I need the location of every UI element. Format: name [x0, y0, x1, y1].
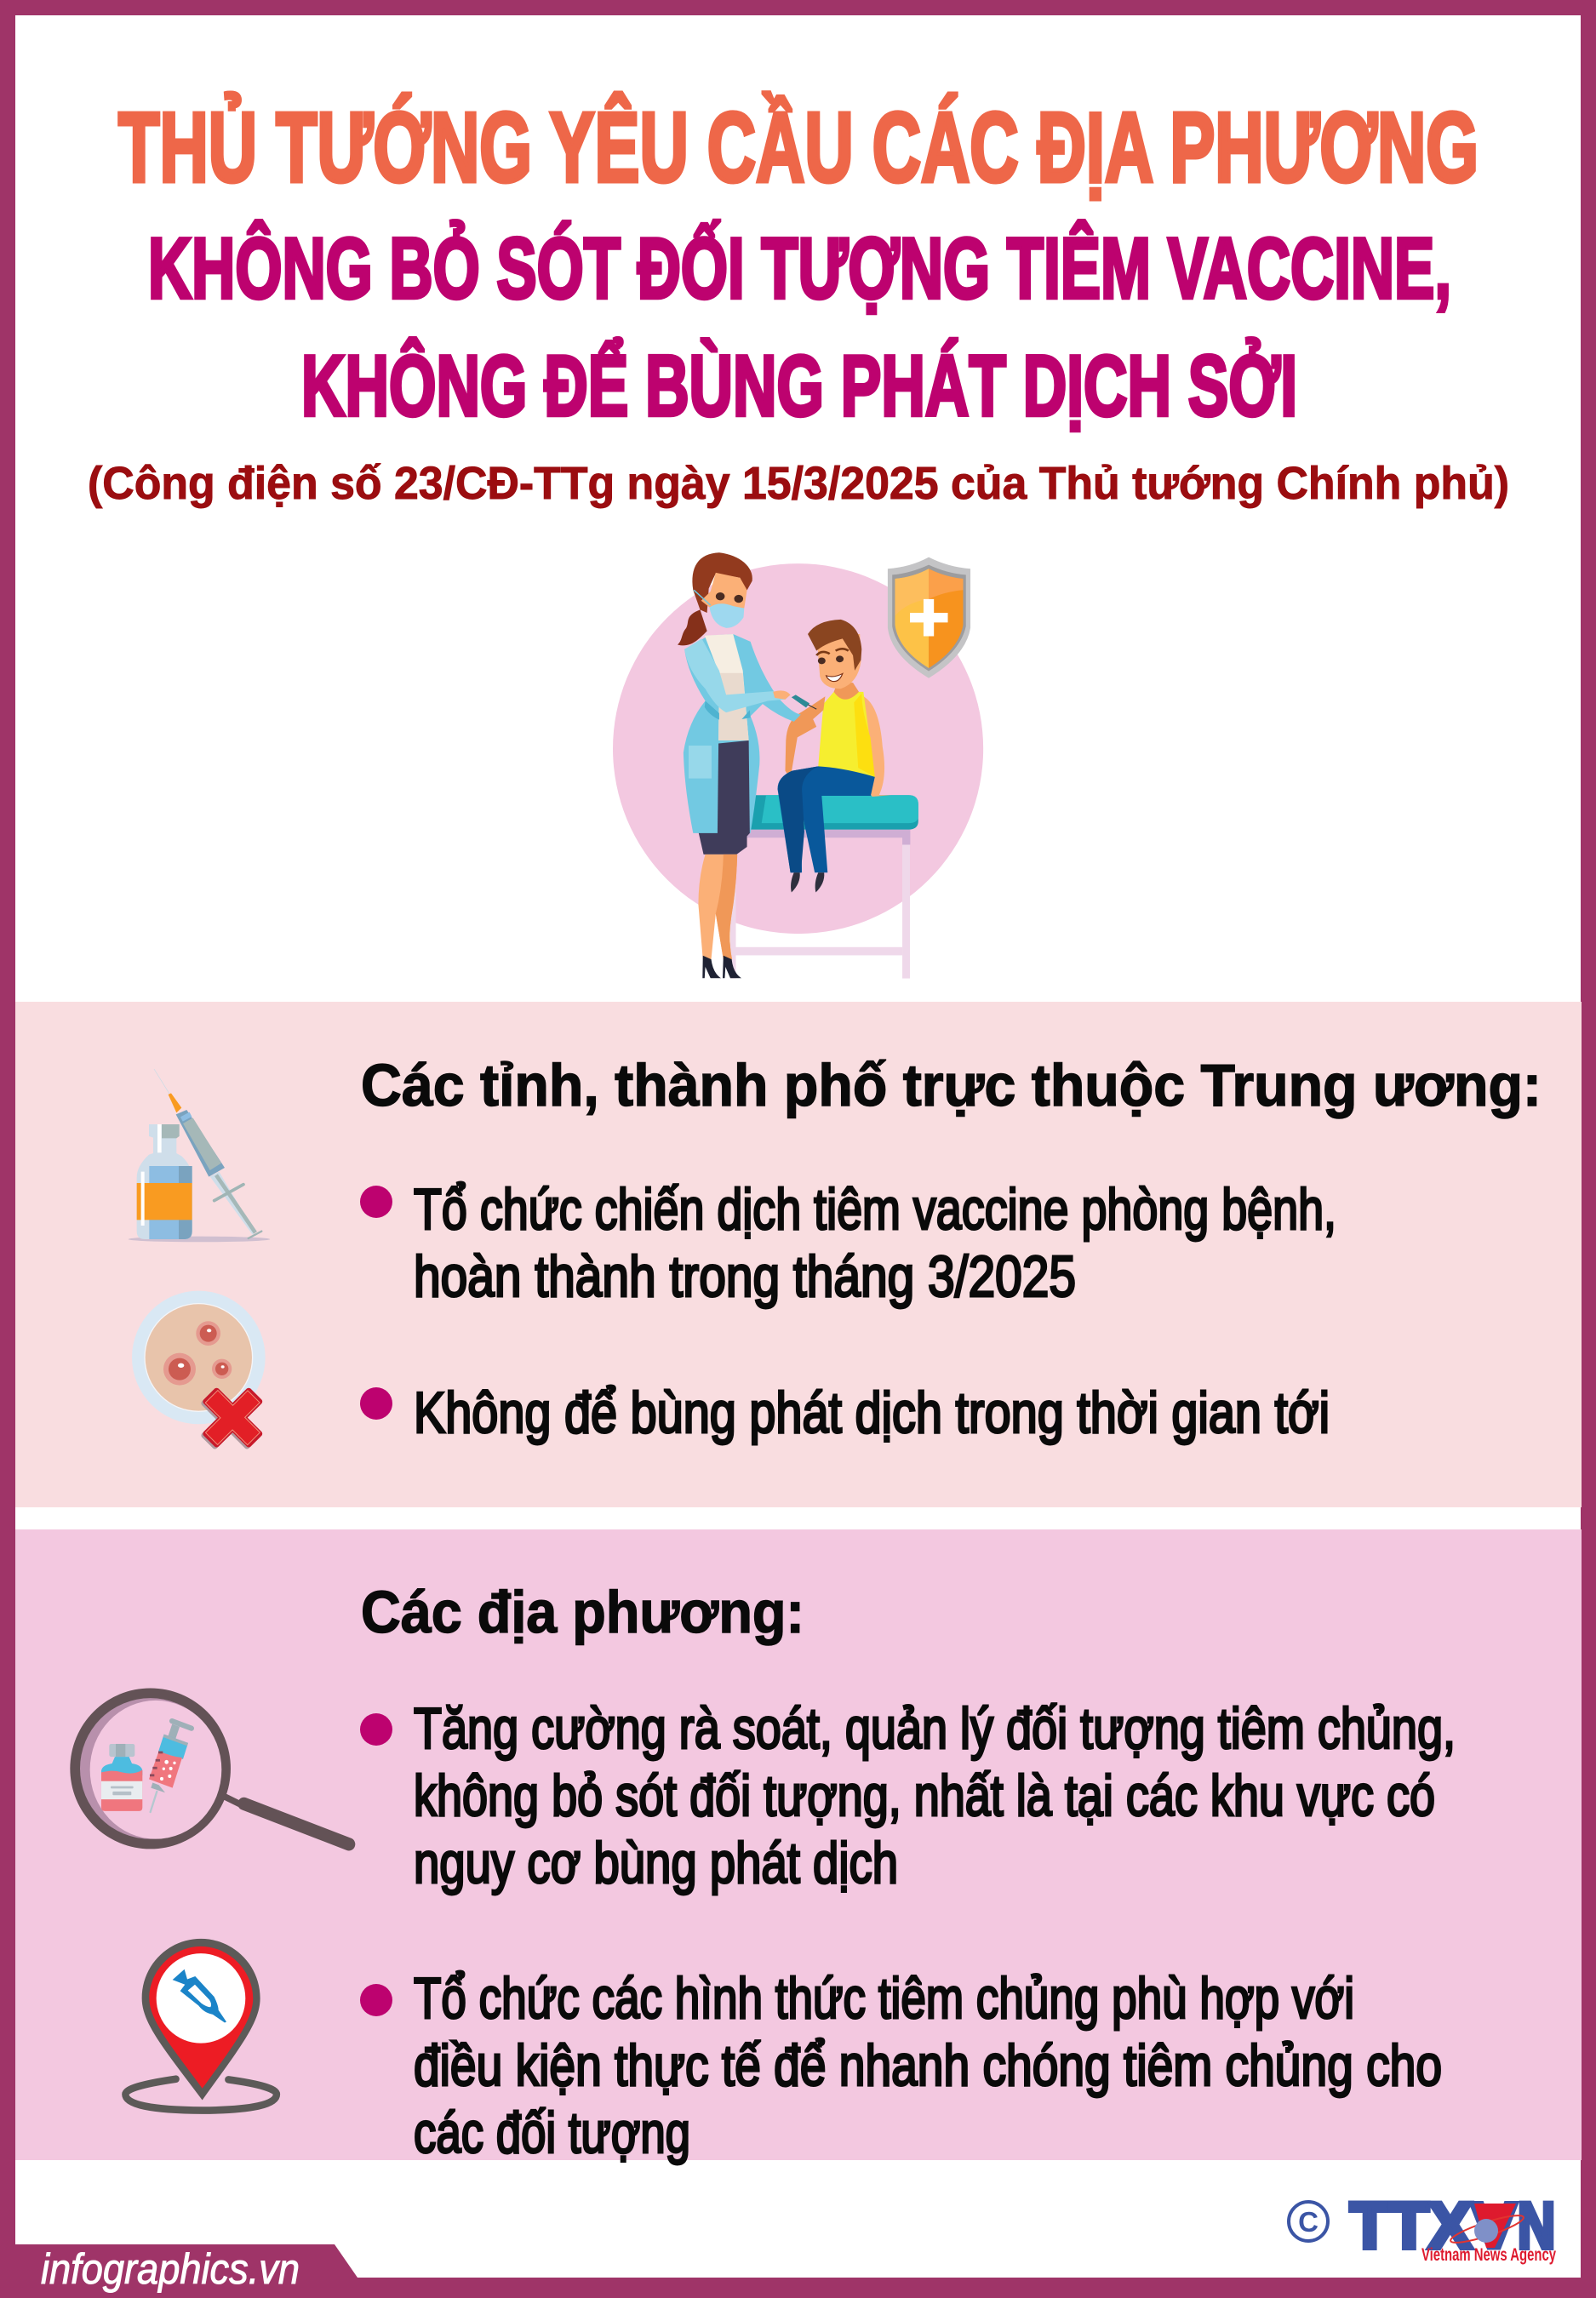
copyright symbol [1289, 2202, 1328, 2241]
copyright symbol: C [1298, 2206, 1319, 2238]
logo: TTXVN: N [1518, 2190, 1555, 2262]
bullet text 1: Tổ chức chiến dịch tiêm vaccine phòng bệnh, [414, 1177, 1336, 1242]
panel: provinces [15, 1002, 1582, 1507]
logo: TTXVN [1350, 2190, 1556, 2265]
icon: skin rash with red cross [132, 1291, 279, 1466]
patient [777, 620, 891, 893]
shield icon [888, 557, 970, 678]
panel: localities [15, 1529, 1582, 2165]
panel background [15, 1529, 1582, 2160]
bullet dot 4 [360, 1984, 392, 2016]
bullet dot 3 [360, 1713, 392, 1746]
logo: TTXVN: V [1471, 2190, 1517, 2262]
bullet text 2: Không để bùng phát dịch trong thời gian tới [414, 1381, 1330, 1445]
syringe in nurse hand [792, 695, 816, 709]
bullet text 4: các đối tượng [414, 2101, 690, 2165]
bullet dot 1 [360, 1186, 392, 1218]
bullet text 3 [414, 1696, 1456, 1895]
panel background [15, 1002, 1582, 1507]
bullet text 3: nguy cơ bùng phát dịch [414, 1831, 898, 1895]
nurse [678, 552, 801, 978]
footer source label: infographics.vn [41, 2245, 300, 2293]
bullet text 1: hoàn thành trong tháng 3/2025 [414, 1244, 1076, 1309]
icon: map pin with syringe [125, 1939, 277, 2111]
bullet text 4: Tổ chức các hình thức tiêm chủng phù hợp với [414, 1966, 1354, 2031]
bullet text 1 [414, 1177, 1336, 1309]
exam table frame [730, 795, 918, 979]
bullet dot 2 [360, 1387, 392, 1420]
subtitle: (Công điện số 23/CĐ-TTg ngày 15/3/2025 của Thủ tướng Chính phủ) [88, 458, 1509, 509]
heading: localities: Các địa phương: [361, 1579, 804, 1645]
icon: vaccine vial and syringe [129, 1069, 270, 1242]
heading: provinces: Các tỉnh, thành phố trực thuộc Trung ương: [361, 1052, 1542, 1118]
illustration: nurse vaccinating a patient [613, 552, 983, 979]
pink circle backdrop [613, 563, 983, 934]
logo: TTXVN: TTX [1350, 2190, 1472, 2262]
bullet text 4 [414, 1966, 1442, 2165]
title block [88, 92, 1509, 509]
icon: magnifier over vaccine [70, 1688, 349, 1849]
